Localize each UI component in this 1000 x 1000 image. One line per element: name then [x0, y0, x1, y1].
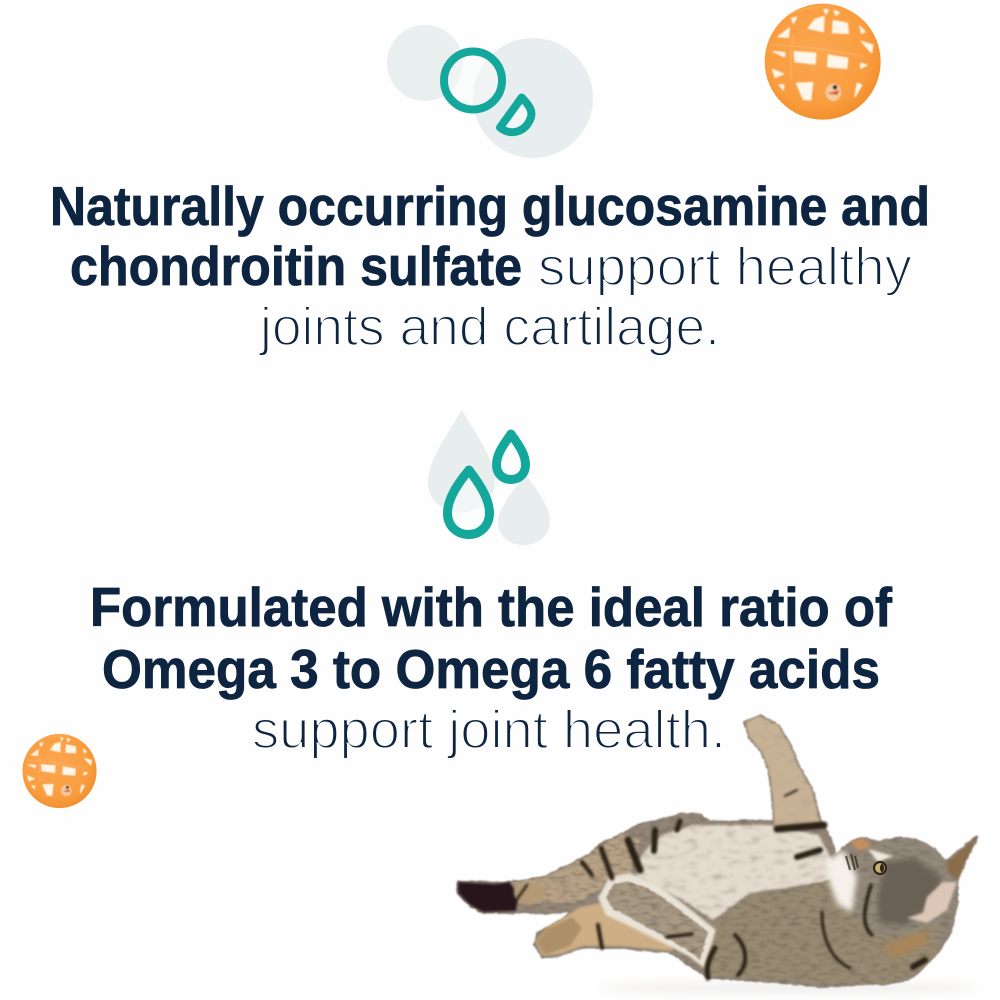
nose and muzzle: [850, 838, 872, 851]
whiskers: [846, 854, 858, 870]
thigh fur: [606, 881, 708, 960]
text block: glucosamine and chondroitin: joints and cartilage.: [258, 297, 720, 357]
tail tip: [458, 882, 518, 912]
lower hind paw: [535, 903, 673, 956]
tan neck patch: [880, 928, 930, 958]
text block: omega fatty acids: Omega 3 to Omega 6 fatty acids: [102, 638, 880, 700]
back ear: [947, 837, 977, 880]
text block: glucosamine and chondroitin: [50, 175, 930, 357]
text block: omega fatty acids: [90, 576, 893, 760]
tabby stripes: [515, 790, 925, 978]
cat silhouette: [458, 716, 977, 986]
icon: orange ball top right: [765, 4, 881, 120]
paw under tail: [514, 882, 546, 904]
text block: glucosamine and chondroitin: support healthy: [538, 237, 912, 297]
text block: omega fatty acids: Formulated with the ideal ratio of: [90, 576, 893, 638]
icon: molecules: [387, 25, 593, 158]
text block: glucosamine and chondroitin: Naturally occurring glucosamine and: [50, 175, 930, 237]
head: [852, 838, 957, 935]
text block: omega fatty acids: support joint health.: [252, 700, 726, 760]
dark forehead: [877, 858, 942, 926]
chin: [826, 850, 857, 912]
front ear: [907, 882, 957, 923]
raised front leg: [745, 716, 820, 830]
eye: [874, 862, 886, 874]
photo: tabby cat lying on its back: [458, 716, 980, 993]
text block: glucosamine and chondroitin: chondroitin sulfate: [70, 235, 522, 297]
upper hind leg: [505, 835, 640, 905]
thigh: [598, 873, 716, 968]
icon: droplets: [428, 410, 550, 545]
pale brow: [868, 849, 893, 862]
lower body fur: [690, 880, 940, 984]
belly: [637, 825, 833, 920]
icon: orange ball left: [22, 734, 97, 808]
